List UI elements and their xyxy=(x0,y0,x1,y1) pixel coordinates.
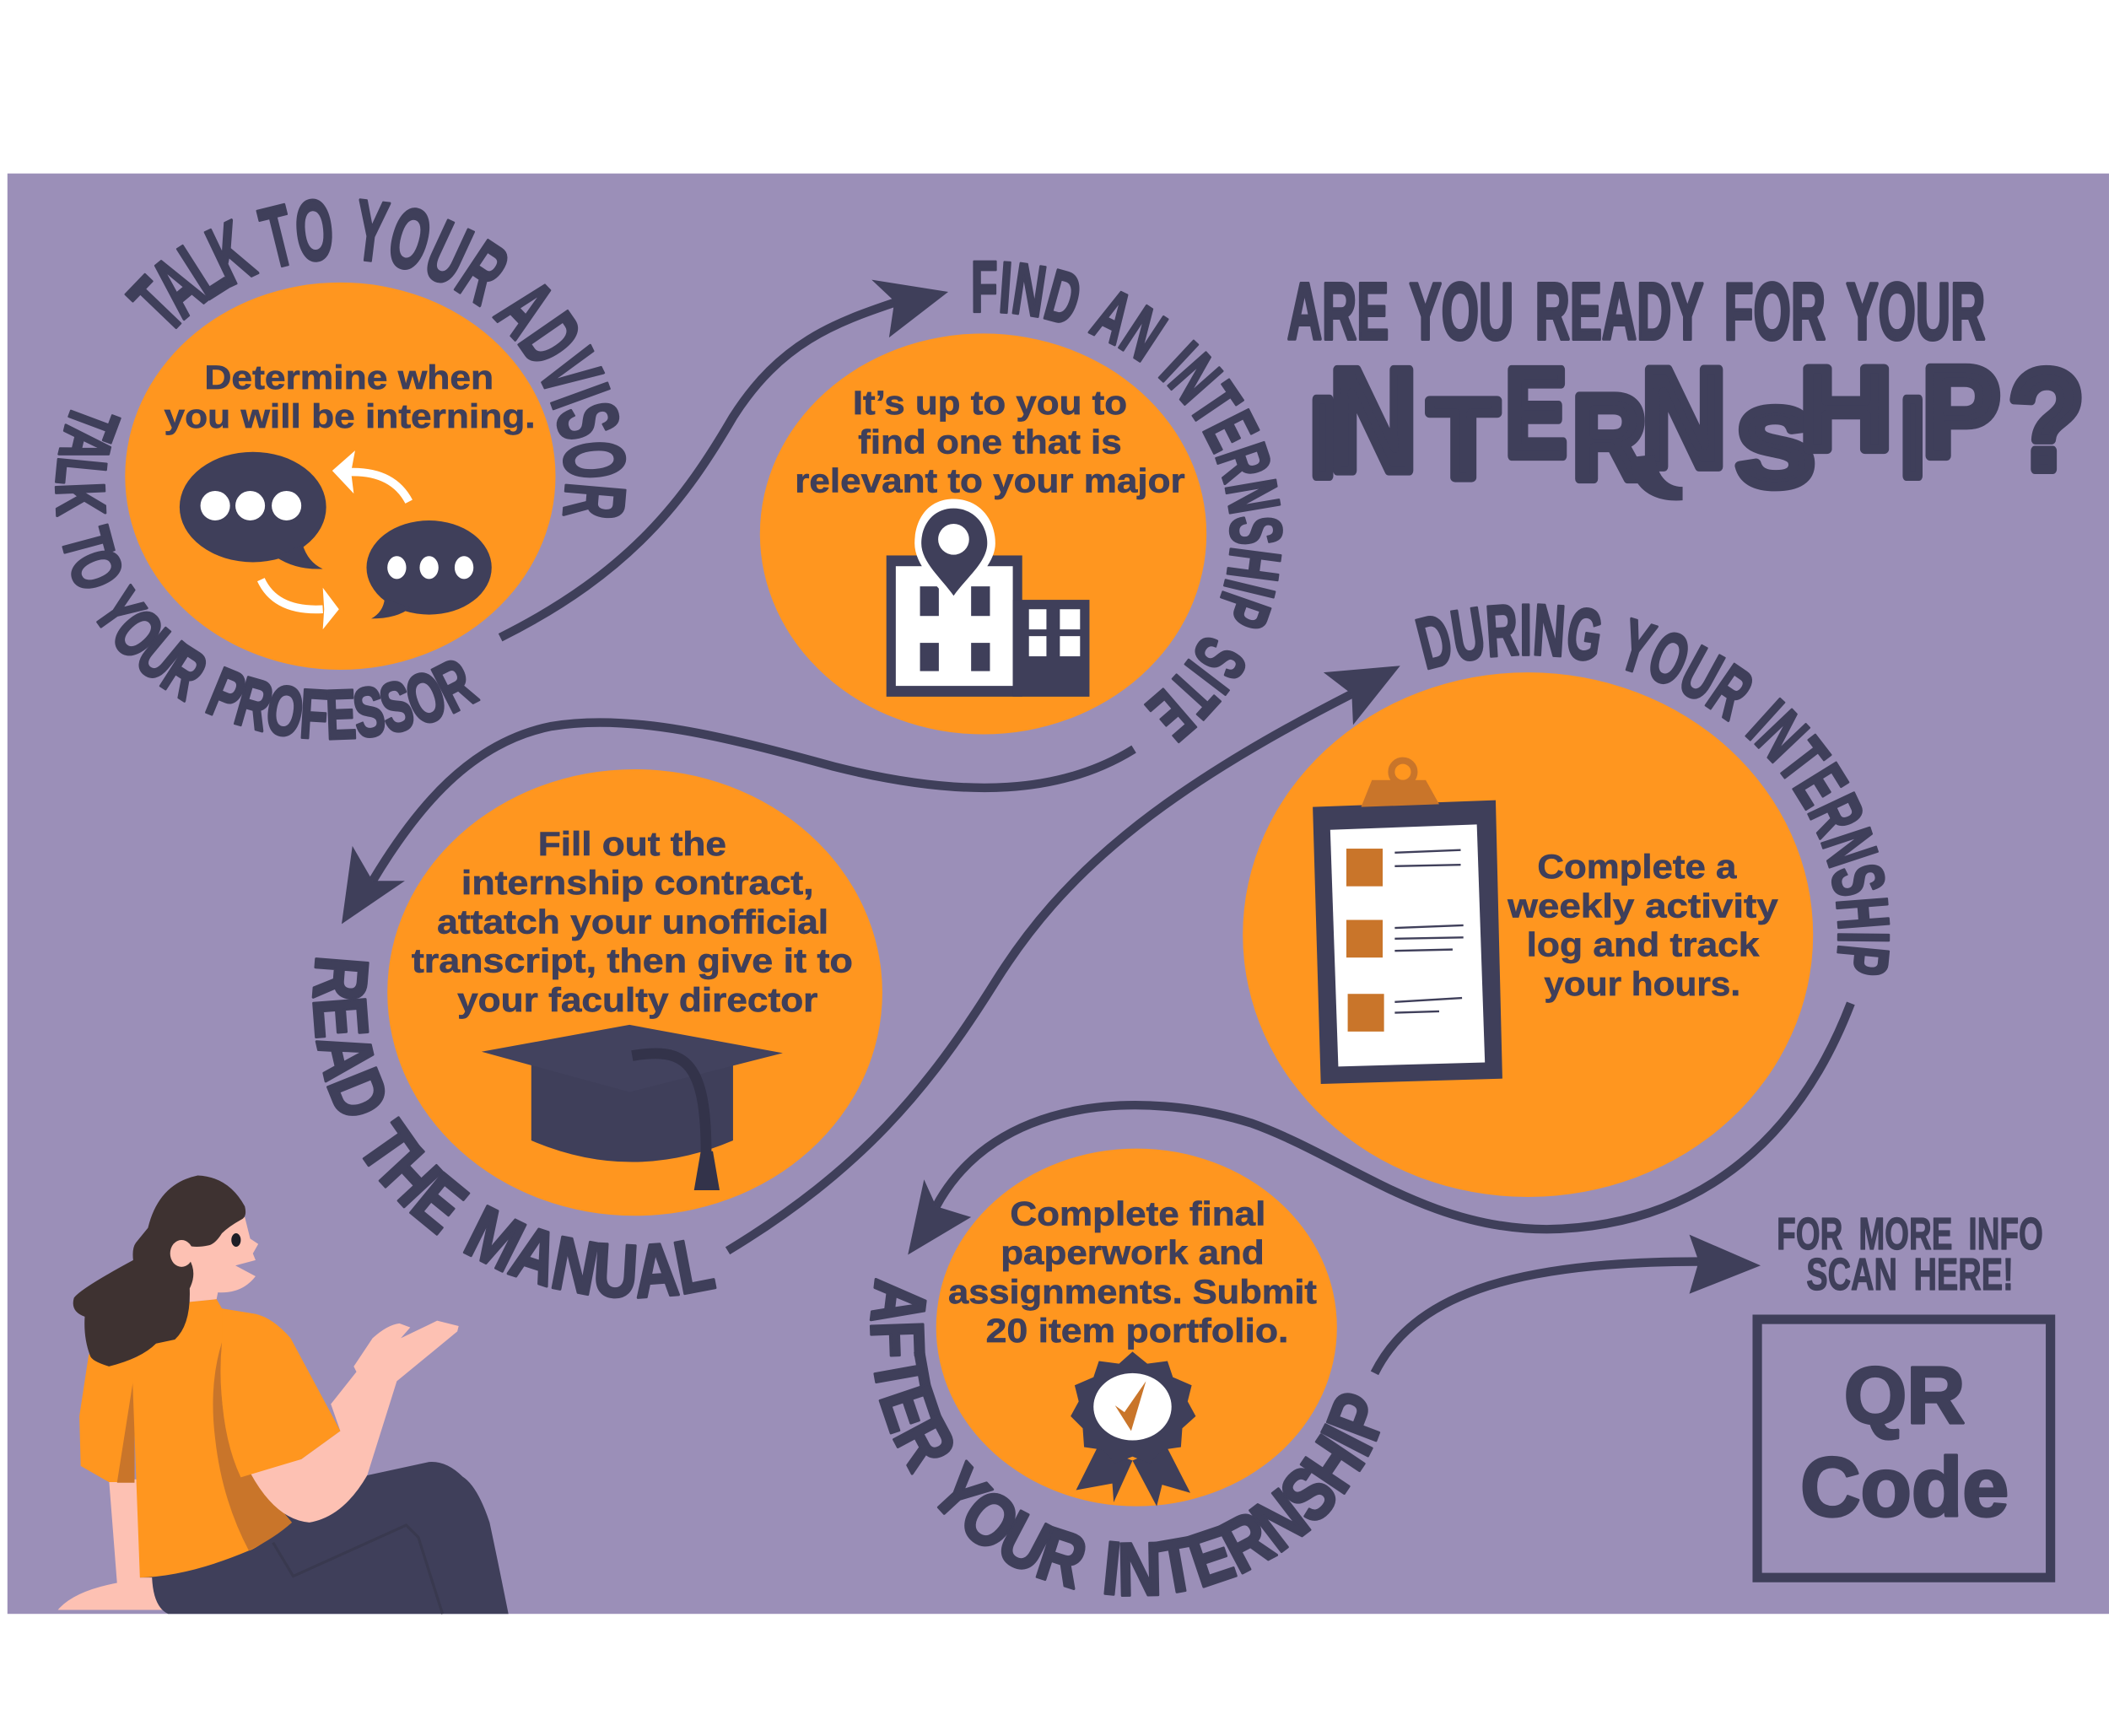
icon: clipboard checklist xyxy=(1313,761,1502,1084)
R tail flourish xyxy=(1630,455,1683,500)
icon: building with location pin xyxy=(887,499,1089,697)
step 3: read the manual xyxy=(312,769,882,1299)
step 5: after your internship xyxy=(869,1149,1380,1597)
back sleeve xyxy=(79,1355,134,1482)
step 5 text: assignments. Submit xyxy=(948,1274,1317,1311)
step 1 curved heading: advisor: TALK TO YOUR ADVISOR xyxy=(125,198,627,518)
step 2 text xyxy=(795,385,1185,500)
title: E xyxy=(1505,343,1567,483)
step 3 text xyxy=(412,826,853,1019)
title: ? xyxy=(2008,340,2085,499)
left arm and hand xyxy=(58,1480,165,1609)
shirt xyxy=(132,1299,340,1577)
step 1 text: you will be interning. xyxy=(165,398,536,435)
title: P xyxy=(1922,341,2000,483)
eye xyxy=(231,1233,240,1247)
arrow: step 5 to QR code xyxy=(1374,1235,1761,1373)
step 4 circle xyxy=(1243,672,1813,1197)
step 3 curved heading: READ THE MANUAL xyxy=(312,957,717,1299)
sleeve xyxy=(221,1308,340,1477)
step 5 text: Complete final xyxy=(1010,1195,1265,1232)
title: T xyxy=(1428,377,1498,502)
step 3 text: your faculty director xyxy=(457,982,817,1019)
title: S xyxy=(1736,386,1815,509)
step 3 circle xyxy=(387,769,882,1216)
step 2 text: relevant to your major xyxy=(795,463,1185,500)
step 3 text: transcript, then give it to xyxy=(412,943,853,980)
step 2 circle xyxy=(760,333,1206,735)
step 4 text: your hours. xyxy=(1544,966,1740,1003)
hair xyxy=(73,1175,245,1367)
icon: chat bubbles with arrows xyxy=(180,450,492,629)
icon: graduation cap xyxy=(482,1025,783,1190)
step 5 text: 20 item portfolio. xyxy=(986,1313,1288,1350)
step 1 text: Determine when xyxy=(204,359,494,396)
QR prompt text xyxy=(1777,1209,2043,1300)
step 1 circle xyxy=(125,283,555,670)
step 3 text: attatch your unofficial xyxy=(437,903,828,941)
trousers xyxy=(140,1462,509,1614)
step 4 text: log and track xyxy=(1527,927,1760,964)
arrow: step 4 to step 5 xyxy=(908,1003,1851,1255)
title: I xyxy=(1901,375,1925,500)
title: R xyxy=(1572,372,1647,505)
face and neck xyxy=(188,1217,258,1302)
illustration: seated woman xyxy=(58,1175,509,1614)
step 2 text: find one that is xyxy=(858,423,1122,461)
title: I xyxy=(1310,375,1335,500)
icon: award ribbon with check xyxy=(1071,1351,1195,1507)
right arm and hand xyxy=(251,1321,459,1523)
step 4 text: Complete a xyxy=(1537,849,1737,886)
ear xyxy=(170,1240,193,1267)
arrow: step 3 to step 4 xyxy=(728,666,1400,1251)
step 1 text xyxy=(165,359,536,435)
step 5 curved heading: AFTER YOUR INTERNSHIP xyxy=(869,1278,1380,1597)
title: N xyxy=(1641,339,1727,497)
arrow: step 2 to step 3 xyxy=(342,722,1134,924)
QR code placeholder box xyxy=(1757,1319,2051,1577)
step 1 curved heading: professor: TALK TO YOUR PROFESSOR xyxy=(54,410,481,741)
step 3 text: internship contract, xyxy=(461,865,814,902)
QR code placeholder box: Code xyxy=(1800,1441,2009,1534)
QR prompt text: SCAN HERE! xyxy=(1806,1249,2014,1300)
step 1: talk to your advisor xyxy=(54,198,627,741)
step 3 text: Fill out the xyxy=(538,826,726,863)
step 5 text xyxy=(948,1195,1317,1350)
step 5 text: paperwork and xyxy=(1001,1235,1265,1272)
QR code placeholder box: QR xyxy=(1844,1351,1965,1441)
step 2 curved heading: FIND AN INTERNSHIP SITE xyxy=(973,260,1283,744)
step 4 curved heading: DURING YOUR INTERNSHIP xyxy=(1415,603,1890,975)
arrow: step 1 to step 2 xyxy=(500,280,948,638)
step 5 circle xyxy=(936,1149,1337,1507)
step 2 text: It’s up to you to xyxy=(853,385,1127,422)
title: N xyxy=(1329,338,1417,502)
title xyxy=(1287,267,2085,509)
title: H xyxy=(1799,344,1892,475)
step 4: during your internship xyxy=(1243,603,1890,1197)
step 4 text xyxy=(1507,849,1778,1003)
step 4 text: weekly activity xyxy=(1507,887,1778,925)
step 2: find an internship site xyxy=(759,260,1283,744)
